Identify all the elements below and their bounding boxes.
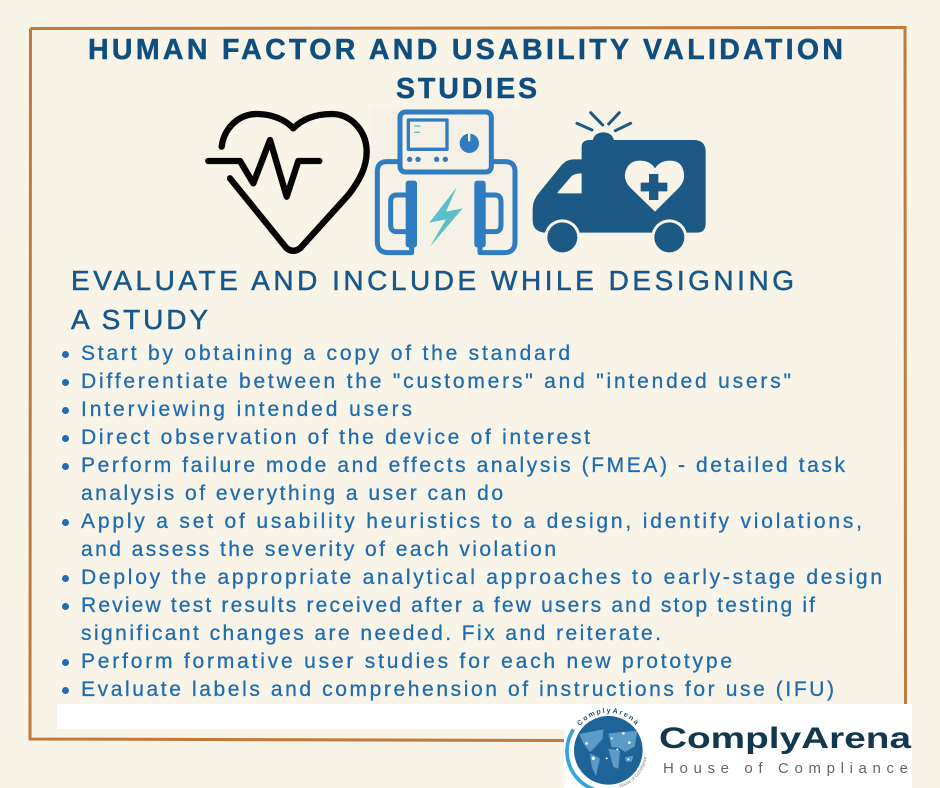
icon: defibrillator (372, 108, 520, 255)
bullet list: significant changes are needed. Fix and reiterate. (81, 622, 661, 645)
bullet list: Review test results received after a few users and stop testing if (81, 594, 815, 617)
bullet list: Direct observation of the device of interest (81, 426, 590, 449)
bullet list: Apply a set of usability heuristics to a design, identify violations, (81, 510, 862, 533)
bullet list: analysis of everything a user can do (81, 482, 503, 505)
bullet list: Perform formative user studies for each new prototype (81, 650, 732, 673)
logo: ComplyArena globe: ComplyArena (577, 708, 638, 725)
white footer strip (57, 704, 912, 788)
section heading: EVALUATE AND INCLUDE WHILE DESIGNING (71, 265, 794, 296)
icon: ambulance (533, 113, 706, 255)
logo: ComplyArena globe (565, 708, 646, 788)
bullet list: Evaluate labels and comprehension of instructions for use (IFU) (81, 678, 834, 701)
title: HUMAN FACTOR AND USABILITY VALIDATION (88, 34, 843, 66)
bullet list: and assess the severity of each violation (81, 538, 556, 561)
bullet list (62, 342, 882, 701)
logo: ComplyArena globe: House of Compliance (619, 756, 646, 788)
bullet list: Perform failure mode and effects analysis (FMEA) - detailed task (81, 454, 846, 477)
bullet list: Differentiate between the "customers" and "intended users" (81, 370, 791, 393)
bullet list: Start by obtaining a copy of the standard (81, 342, 570, 365)
title (88, 34, 843, 105)
bullet list: Deploy the appropriate analytical approaches to early-stage design (81, 566, 882, 589)
logo wordmark: House of Compliance (663, 760, 908, 777)
bullet list: Interviewing intended users (81, 398, 412, 421)
logo wordmark (659, 722, 911, 777)
icon: heart with pulse (208, 114, 367, 251)
logo wordmark: ComplyArena (659, 722, 911, 755)
section heading: A STUDY (71, 304, 208, 335)
title: STUDIES (396, 73, 537, 105)
section heading (71, 265, 794, 335)
